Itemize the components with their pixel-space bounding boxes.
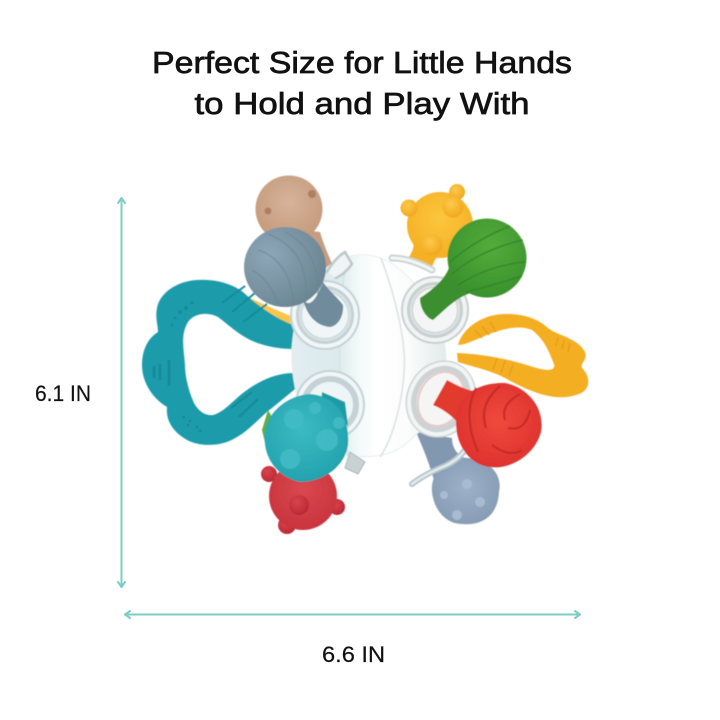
width dimension arrow [125, 611, 580, 618]
product illustration: sensory teether toy [142, 176, 588, 534]
height label: 6.1 IN [35, 381, 91, 406]
green ribbed ball [420, 218, 526, 320]
teal teether [142, 280, 300, 445]
clear ring bottom right [398, 353, 484, 445]
yellow knobbed ball [400, 184, 473, 268]
teal knobbed ball [265, 392, 348, 482]
title [152, 45, 572, 121]
yellow teether [250, 298, 588, 397]
orange-red ribbed ball [433, 380, 542, 467]
white central body [292, 255, 446, 457]
title: to Hold and Play With [194, 86, 530, 121]
slate ribbed ball [244, 227, 343, 327]
clear ring bottom left [299, 374, 361, 436]
width label: 6.6 IN [322, 642, 385, 667]
clear ring top right [405, 280, 465, 340]
green ball hidden behind teal [262, 410, 285, 455]
clear clips [327, 252, 465, 484]
height dimension arrow [118, 198, 125, 587]
red knobbed ball [261, 462, 345, 534]
title: Perfect Size for Little Hands [152, 45, 572, 80]
brown ball [256, 176, 340, 290]
clear ring top left [294, 284, 356, 346]
grey-blue ball [416, 432, 500, 524]
